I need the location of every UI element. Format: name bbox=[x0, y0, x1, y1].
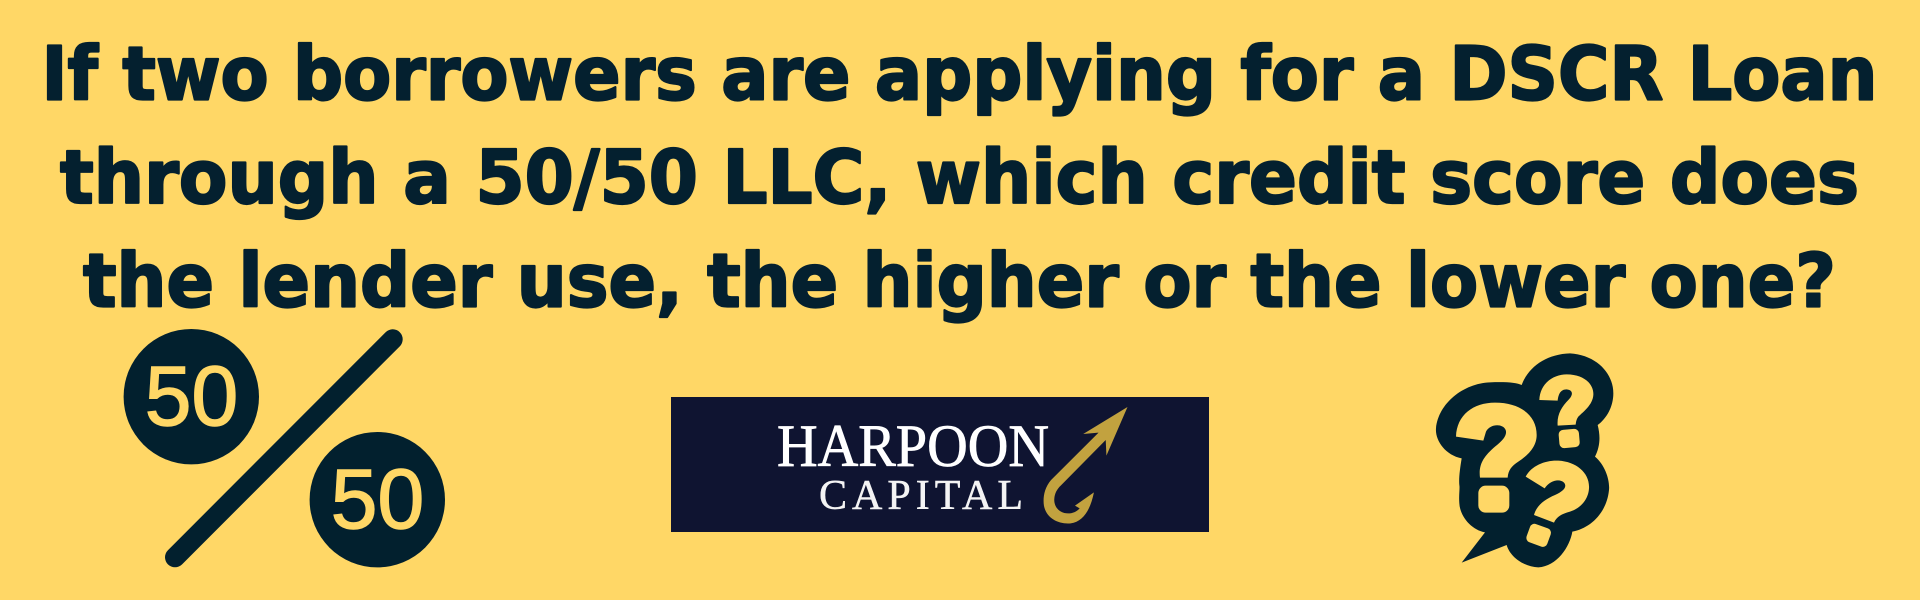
icon: 50/50 percent sign bbox=[124, 329, 445, 567]
icon: 50/50 percent sign: 50 bbox=[331, 452, 424, 546]
icon: question marks speech bubble bbox=[1436, 353, 1613, 567]
title: through a 50/50 LLC, which credit score does bbox=[60, 135, 1859, 221]
logo: Harpoon Capital bbox=[671, 397, 1209, 532]
logo: Harpoon Capital: CAPITAL bbox=[819, 473, 1023, 519]
icon: 50/50 percent sign: 50 bbox=[145, 349, 238, 443]
title: the lender use, the higher or the lower one? bbox=[83, 238, 1836, 324]
logo: Harpoon Capital: HARPOON bbox=[777, 413, 1049, 479]
title bbox=[42, 32, 1878, 324]
